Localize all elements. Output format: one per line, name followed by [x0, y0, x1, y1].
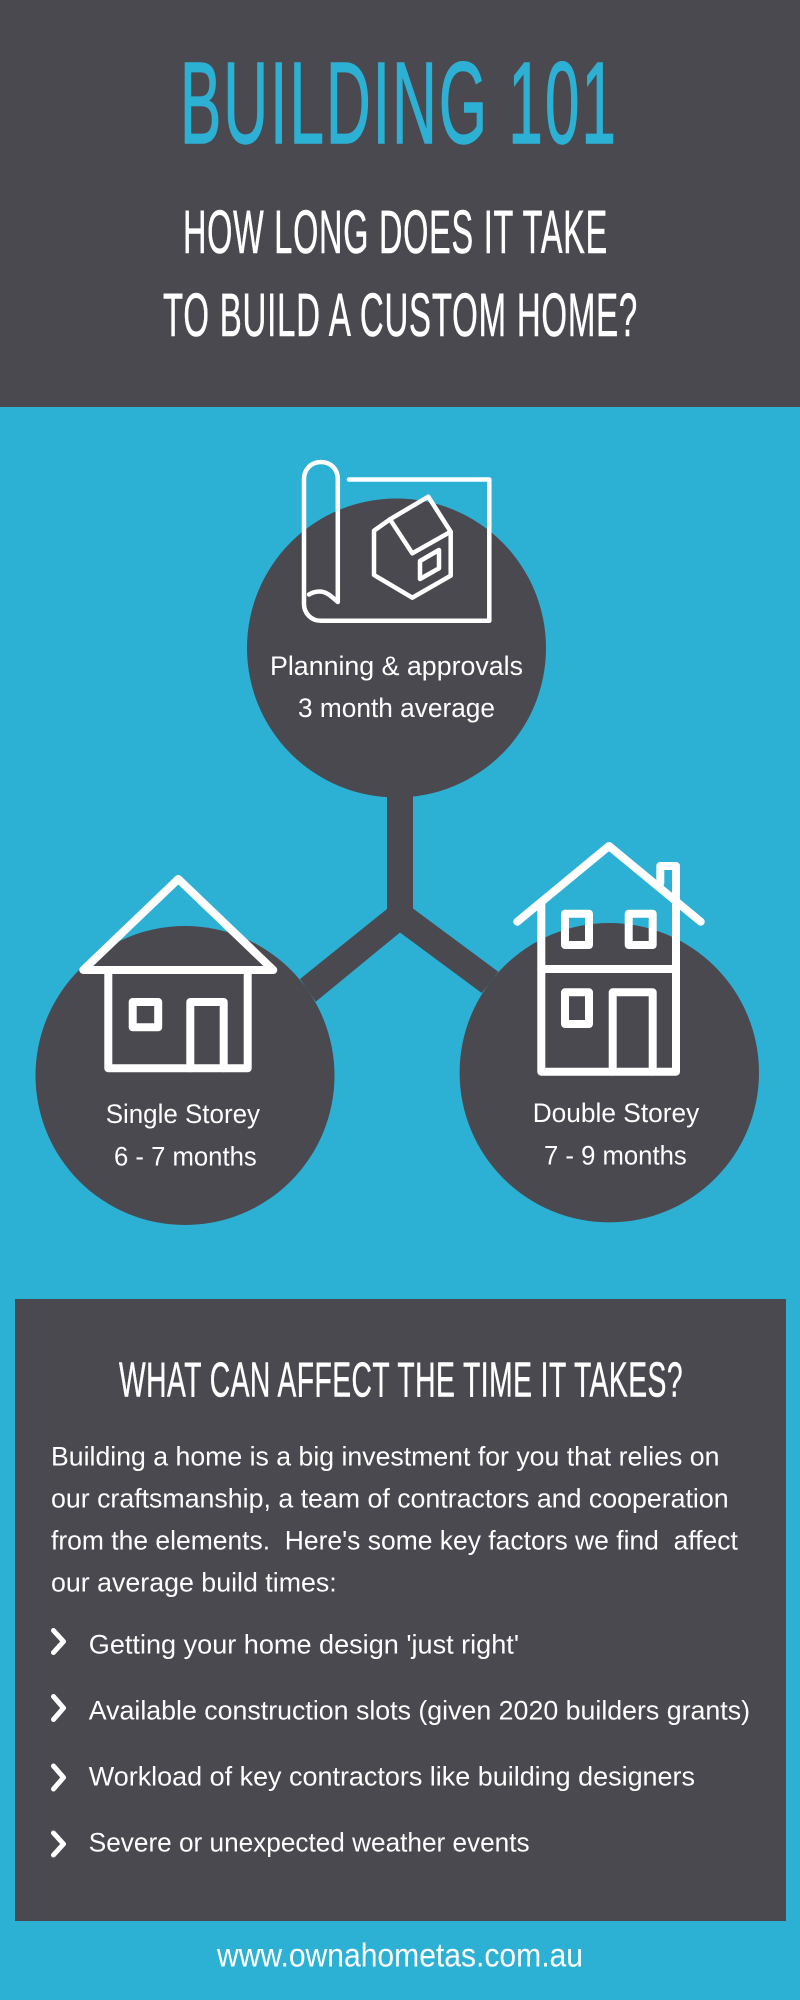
- list item: construction slots: Available construction slots (given 2020 builders grants): [89, 1695, 750, 1725]
- label: single storey: 6 - 7 months: [114, 1142, 257, 1172]
- icon: blueprint: [304, 462, 489, 621]
- text block: intro paragraph: [51, 1441, 738, 1597]
- list item: weather: Severe or unexpected weather events: [89, 1828, 530, 1858]
- list item: home design: Getting your home design 'just right': [89, 1629, 519, 1659]
- label: single storey: [106, 1099, 260, 1172]
- label: planning: Planning & approvals: [270, 651, 523, 681]
- label: planning: [270, 651, 523, 723]
- panel: planning and approvals: [247, 462, 546, 798]
- icon: double storey house: [517, 846, 701, 1072]
- text block: intro paragraph: our average build times:: [51, 1567, 337, 1597]
- icon: single storey house: [83, 879, 273, 1068]
- panel: factors: [15, 1299, 786, 1921]
- list item: contractors: Workload of key contractors like building designers: [89, 1761, 695, 1791]
- label: single storey: Single Storey: [106, 1099, 260, 1129]
- panel: double storey: [460, 846, 759, 1222]
- label: double storey: [533, 1098, 700, 1171]
- subtitle: [163, 198, 638, 349]
- text block: intro paragraph: our craftsmanship, a team of contractors and cooperation: [51, 1483, 729, 1513]
- text block: intro paragraph: from the elements. Here's some key factors we find affect: [51, 1525, 738, 1555]
- label: planning: 3 month average: [298, 693, 495, 723]
- panel: header: [0, 0, 800, 407]
- label: double storey: 7 - 9 months: [544, 1141, 687, 1171]
- panel: single storey: [36, 879, 334, 1225]
- connector between stages: [300, 790, 498, 1002]
- text block: intro paragraph: Building a home is a big investment for you that relies on: [51, 1441, 719, 1471]
- label: double storey: Double Storey: [533, 1098, 700, 1128]
- footer url: www.ownahometas.com.au: [216, 1937, 583, 1974]
